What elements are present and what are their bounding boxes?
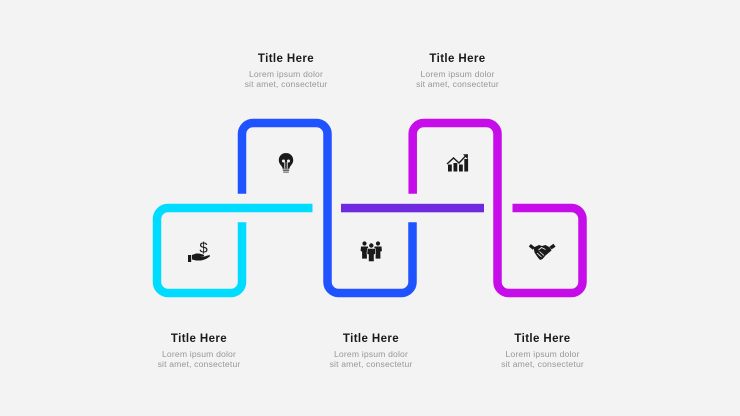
- text block: step 5: [501, 332, 584, 369]
- icon: growth chart with arrow: [447, 154, 468, 172]
- icon: hand holding dollar: $: [199, 240, 208, 256]
- text block: step 5: Lorem ipsum dolor: [505, 348, 580, 358]
- text block: step 4: sit amet, consectetur: [416, 79, 499, 89]
- text block: step 1: sit amet, consectetur: [158, 359, 240, 369]
- text block: step 4: Title Here: [429, 52, 486, 64]
- text block: step 3: Title Here: [343, 332, 399, 344]
- text block: step 5: Title Here: [514, 332, 571, 344]
- text block: step 4: [416, 52, 499, 89]
- text block: step 2: sit amet, consectetur: [245, 79, 327, 89]
- line: blue loop: [242, 123, 412, 293]
- icon: team of people: [361, 241, 382, 262]
- text block: step 3: Lorem ipsum dolor: [334, 348, 408, 358]
- text block: step 3: sit amet, consectetur: [330, 359, 412, 369]
- text block: step 2: [245, 52, 328, 89]
- text block: step 3: [330, 332, 412, 369]
- text block: step 1: Title Here: [171, 332, 227, 344]
- icon: handshake: [529, 244, 556, 260]
- text block: step 2: Title Here: [258, 52, 314, 64]
- line: cyan loop: [157, 208, 312, 293]
- text block: step 5: sit amet, consectetur: [501, 359, 584, 369]
- line: purple bar: [341, 204, 484, 212]
- text block: step 2: Lorem ipsum dolor: [249, 68, 323, 78]
- line: magenta loop: [413, 123, 582, 293]
- text block: step 1: Lorem ipsum dolor: [162, 348, 236, 358]
- text block: step 1: [158, 332, 240, 369]
- text block: step 4: Lorem ipsum dolor: [420, 68, 495, 78]
- icon: hand holding dollar: [188, 240, 210, 262]
- icon: light bulb: [279, 153, 293, 173]
